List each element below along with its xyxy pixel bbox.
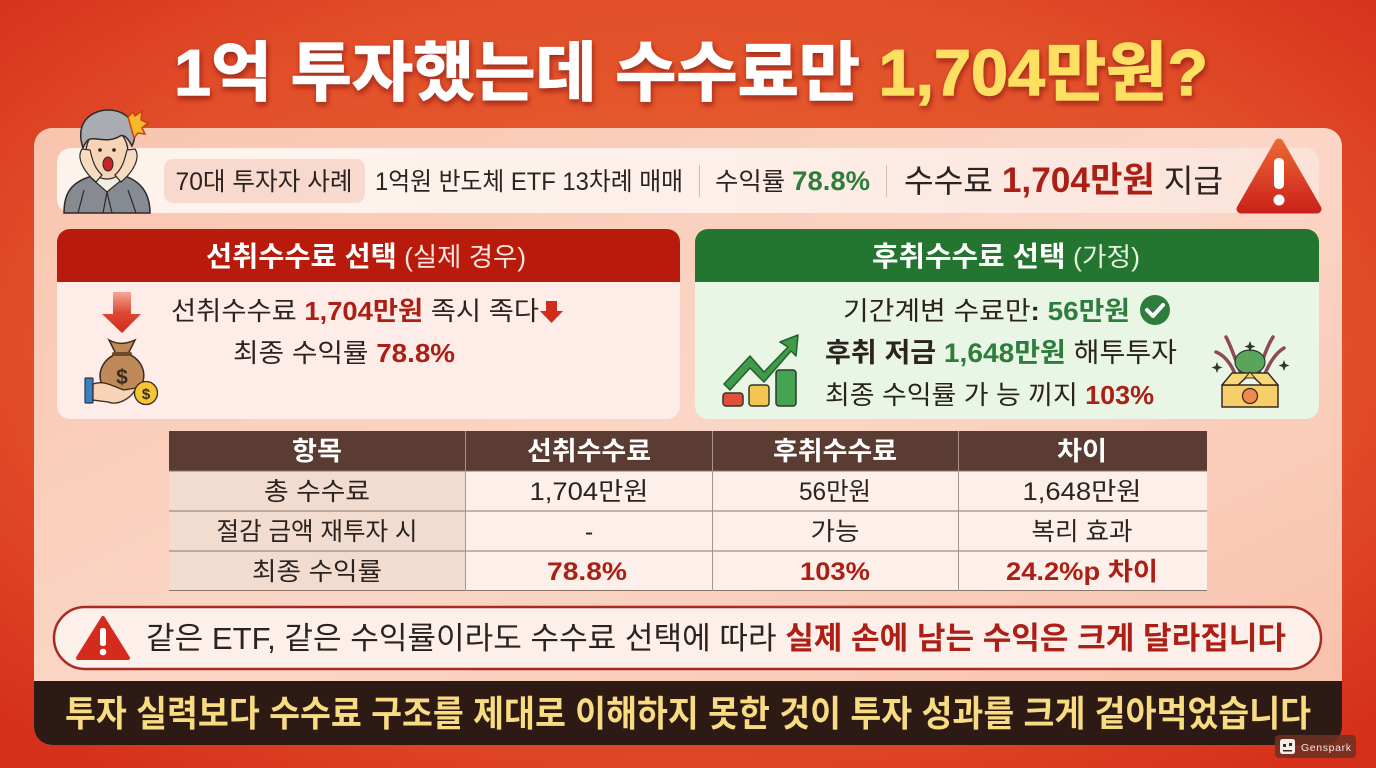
bottom banner: 투자 실력보다 수수료 구조를 제대로 이해하지 못한 것이 투자 성과를 크게 겉아먹었습니다 bbox=[65, 693, 1311, 734]
watermark badge bbox=[1275, 735, 1356, 758]
table header: 차이 bbox=[1057, 436, 1107, 466]
deferred line 3: 최종 수익률 가 능 끼지 103% bbox=[825, 380, 1154, 410]
deferred line 2: 후취 저금 1,648만원 해투투자 bbox=[825, 338, 1177, 368]
table header: 항목 bbox=[292, 436, 342, 466]
title: 1억 투자했는데 수수료만 1,704만원? bbox=[174, 36, 1208, 109]
row: total fee: 1,704만원 bbox=[530, 478, 648, 506]
upfront heading: 선취수수료 선택 (실제 경우) bbox=[206, 241, 526, 272]
deferred heading bbox=[695, 229, 1319, 282]
fee paid: 수수료 1,704만원 지급 bbox=[904, 161, 1223, 200]
table header: 후취수수료 bbox=[773, 436, 897, 466]
table header bbox=[292, 436, 1107, 466]
icon: red down arrow bbox=[102, 292, 141, 333]
upfront line 2: 최종 수익률 78.8% bbox=[233, 338, 455, 368]
callout text: 같은 ETF, 같은 수익률이라도 수수료 선택에 따라 실제 손에 남는 수익은 크게 달라집니다 bbox=[146, 621, 1286, 656]
icon: shocked senior investor bbox=[64, 110, 150, 213]
bottom banner bbox=[34, 681, 1342, 745]
deferred heading: 후취수수료 선택 (가정) bbox=[872, 241, 1140, 272]
icon: warning triangle bbox=[1241, 143, 1317, 209]
icon: small warning bbox=[78, 618, 128, 658]
row: final return bbox=[252, 558, 1158, 586]
icon: money bag in hand: $ bbox=[116, 366, 128, 389]
row: reinvestment: - bbox=[585, 518, 593, 546]
row: total fee: 총 수수료 bbox=[264, 478, 370, 506]
icon: treasure box bbox=[1212, 337, 1290, 407]
case tag: 70대 투자자 사례 bbox=[176, 168, 352, 196]
row: total fee bbox=[264, 478, 1142, 506]
row: final return: 최종 수익률 bbox=[252, 558, 382, 586]
row: final return: 78.8% bbox=[547, 558, 627, 586]
row: total fee: 1,648만원 bbox=[1022, 478, 1142, 506]
comparison table bbox=[169, 431, 1207, 591]
icon: check badge bbox=[1140, 295, 1170, 325]
table header: 선취수수료 bbox=[527, 436, 651, 466]
panel: deferred fee bbox=[695, 229, 1319, 419]
row: final return: 24.2%p 차이 bbox=[1006, 558, 1158, 586]
row: total fee: 56만원 bbox=[799, 478, 871, 506]
row: reinvestment: 복리 효과 bbox=[1032, 518, 1132, 546]
return rate: 수익률 78.8% bbox=[715, 166, 870, 196]
panel: upfront fee bbox=[57, 229, 680, 419]
row: reinvestment: 가능 bbox=[810, 518, 860, 546]
row: final return: 103% bbox=[800, 558, 870, 586]
upfront line 1: 선취수수료 1,704만원 족시 족다 bbox=[171, 296, 539, 326]
main panel bbox=[34, 110, 1342, 745]
row: reinvestment: 절감 금액 재투자 시 bbox=[216, 518, 418, 546]
case tag bbox=[164, 159, 365, 203]
icon: growth chart bbox=[723, 335, 798, 406]
callout bbox=[54, 607, 1321, 669]
case summary strip bbox=[57, 148, 1319, 213]
case description: 1억원 반도체 ETF 13차례 매매 bbox=[375, 168, 683, 196]
deferred line 1: 기간계변 수료만 : 56만원 bbox=[843, 296, 1130, 326]
row: reinvestment bbox=[216, 518, 1132, 546]
icon: money bag in hand bbox=[85, 340, 158, 404]
icon: money bag in hand: $ bbox=[142, 386, 151, 403]
upfront heading bbox=[57, 229, 680, 282]
watermark badge: Genspark bbox=[1301, 742, 1352, 754]
